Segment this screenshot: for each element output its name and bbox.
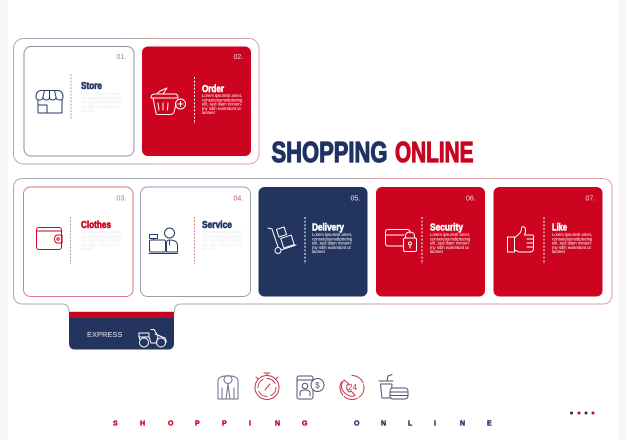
express tab: [69, 312, 174, 350]
card 06: security: [376, 187, 485, 296]
footer lettering: shopping online: N: [381, 420, 386, 428]
footer lettering: shopping online: P: [222, 420, 227, 428]
pagination dots: [570, 412, 594, 414]
icon: stopwatch: [255, 373, 279, 400]
card 01: store: my nibh euismtunt ut: [81, 104, 120, 109]
card 07: like: Lorem ipsumsit amet,: [552, 232, 592, 237]
icon: drink and burger: [379, 374, 408, 399]
footer lettering: shopping online: N: [275, 420, 280, 428]
card 06: security: elit, sed diam nonum-: [430, 241, 471, 246]
card 02: order: Lorem ipsumsit amet,: [202, 93, 242, 98]
card 03: clothes: [24, 187, 133, 296]
card 07: like: [494, 187, 602, 296]
card 04: service: laoreet: [202, 247, 216, 252]
icon: wallet: [36, 228, 62, 250]
card 02: order: [142, 46, 251, 156]
footer lettering: shopping online: G: [302, 420, 308, 428]
card 03: clothes: elit, sed diam nonum-: [81, 238, 122, 243]
card 05: delivery: consetetuersdipiscing: [312, 236, 353, 241]
card 07: like: consetetuersdipiscing: [552, 236, 593, 241]
card 02: order: laoreet: [202, 110, 216, 115]
card 01: store: consetetuersdipiscing: [81, 95, 122, 100]
card 03: clothes: consetetuersdipiscing: [81, 234, 122, 239]
card 05: delivery: Lorem ipsumsit amet,: [312, 232, 352, 237]
icon: 24 hour call: [340, 376, 364, 400]
card 05: delivery: Delivery: [312, 222, 344, 234]
card 06: security: 06.: [466, 196, 476, 202]
icon: shirt and tie: [218, 376, 238, 399]
card 06: security: consetetuersdipiscing: [430, 236, 471, 241]
icon: cashier: [149, 228, 178, 254]
panel: lower group outline with tab: [14, 178, 612, 312]
footer lettering: shopping online: P: [195, 420, 200, 428]
card 05: delivery: elit, sed diam nonum-: [312, 241, 353, 246]
card 04: service: Service: [202, 219, 232, 231]
footer lettering: shopping online: H: [140, 420, 145, 428]
card 07: like: my nibh euismtunt ut: [552, 245, 591, 250]
title: SHOPPING: [272, 137, 388, 169]
icon: hand truck: [268, 227, 296, 254]
card 05: delivery: laoreet: [312, 249, 326, 254]
card 04: service: Lorem ipsumsit amet,: [202, 230, 242, 234]
card 06: security: Security: [430, 222, 463, 234]
icon: phone with dollar: $: [315, 381, 320, 390]
card 06: security: my nibh euismtunt ut: [430, 245, 469, 250]
icon: 24 hour call: 24: [348, 383, 357, 392]
footer lettering: shopping online: N: [460, 420, 465, 428]
card 06: security: Lorem ipsumsit amet,: [430, 232, 470, 237]
card 05: delivery: [258, 187, 368, 296]
card 04: service: 04.: [234, 196, 243, 202]
card 04: service: [140, 187, 250, 296]
card 03: clothes: laoreet: [81, 247, 95, 252]
footer lettering: shopping online: [113, 420, 492, 428]
card 02: order: Order: [202, 83, 224, 95]
card 02: order: consetetuersdipiscing: [202, 97, 243, 102]
card 01: store: Store: [81, 80, 102, 92]
icon: basket with plus: [151, 88, 186, 114]
card 03: clothes: Clothes: [81, 219, 111, 231]
card 06: security: laoreet: [430, 249, 444, 254]
card 03: clothes: my nibh euismtunt ut: [81, 242, 120, 247]
footer lettering: shopping online: L: [408, 420, 413, 428]
express tab: EXPRESS: [87, 330, 122, 339]
card 01: store: [24, 46, 134, 156]
icon: card and padlock: [386, 230, 416, 252]
footer lettering: shopping online: E: [487, 420, 492, 428]
icon: thumbs up: [508, 227, 534, 252]
card 05: delivery: 05.: [350, 196, 360, 202]
card 07: like: 07.: [586, 196, 595, 202]
card 04: service: elit, sed diam nonum-: [202, 238, 243, 243]
icon: store: [36, 90, 63, 113]
card 01: store: elit, sed diam nonum-: [81, 100, 122, 105]
card 07: like: laoreet: [552, 249, 566, 254]
card 03: clothes: 03.: [116, 196, 126, 202]
footer lettering: shopping online: I: [249, 420, 251, 428]
footer lettering: shopping online: O: [168, 420, 174, 428]
card 04: service: my nibh euismtunt ut: [202, 242, 241, 247]
card 02: order: 02.: [234, 54, 243, 61]
card 03: clothes: Lorem ipsumsit amet,: [81, 230, 121, 234]
icon: scooter: [139, 330, 166, 347]
footer lettering: shopping online: O: [354, 420, 360, 428]
panel: top group outline: [14, 38, 259, 164]
card 07: like: Like: [552, 222, 567, 234]
title: ONLINE: [395, 137, 474, 169]
card 01: store: laoreet: [81, 108, 95, 113]
footer lettering: shopping online: I: [434, 420, 436, 428]
card 02: order: elit, sed diam nonum-: [202, 102, 243, 107]
card 05: delivery: my nibh euismtunt ut: [312, 245, 351, 250]
card 01: store: Lorem ipsumsit amet,: [81, 91, 121, 96]
card 02: order: my nibh euismtunt ut: [202, 106, 241, 111]
icon: phone with dollar: [297, 376, 324, 399]
card 07: like: elit, sed diam nonum-: [552, 241, 593, 246]
footer lettering: shopping online: S: [113, 420, 118, 428]
card 04: service: consetetuersdipiscing: [202, 234, 243, 239]
card 01: store: 01.: [116, 54, 126, 61]
